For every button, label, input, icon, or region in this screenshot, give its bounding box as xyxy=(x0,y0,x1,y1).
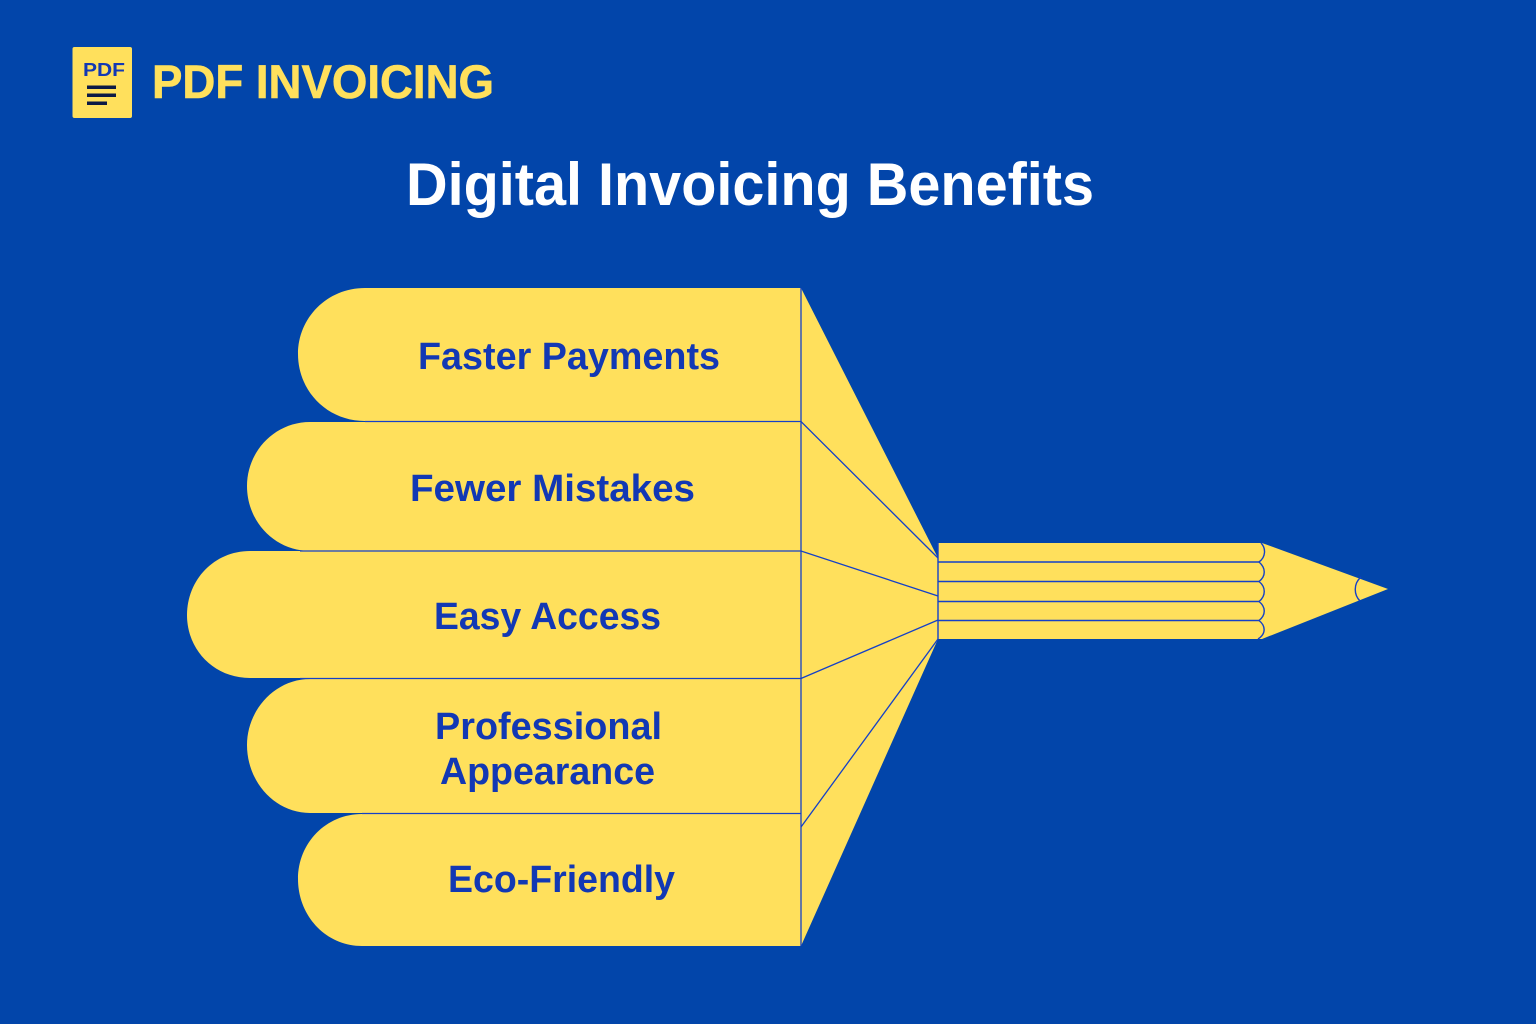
panel: professional appearance: Professional xyxy=(435,706,662,748)
panel: fewer mistakes xyxy=(247,422,938,596)
title: Digital Invoicing Benefits xyxy=(406,151,1094,218)
panel: faster payments: Faster Payments xyxy=(418,336,720,378)
pencil xyxy=(938,543,1388,639)
panel: professional appearance xyxy=(247,620,938,827)
panel: fewer mistakes: Fewer Mistakes xyxy=(410,468,695,510)
logo: PDF invoicing xyxy=(72,47,494,118)
panel: faster payments xyxy=(298,288,938,558)
panel: eco-friendly: Eco-Friendly xyxy=(448,859,675,901)
pencil tip xyxy=(1355,577,1361,601)
panel: eco-friendly xyxy=(298,639,938,946)
infographic: pencil-shaped hand of benefits xyxy=(187,288,1388,946)
panel: easy access: Easy Access xyxy=(434,596,661,638)
brand name: PDF INVOICING xyxy=(152,55,494,108)
pencil body xyxy=(938,543,1388,639)
icon: PDF document xyxy=(72,47,132,118)
panel: easy access xyxy=(187,551,938,678)
icon: PDF document: PDF xyxy=(83,59,125,80)
panel: professional appearance: Appearance xyxy=(440,751,655,793)
